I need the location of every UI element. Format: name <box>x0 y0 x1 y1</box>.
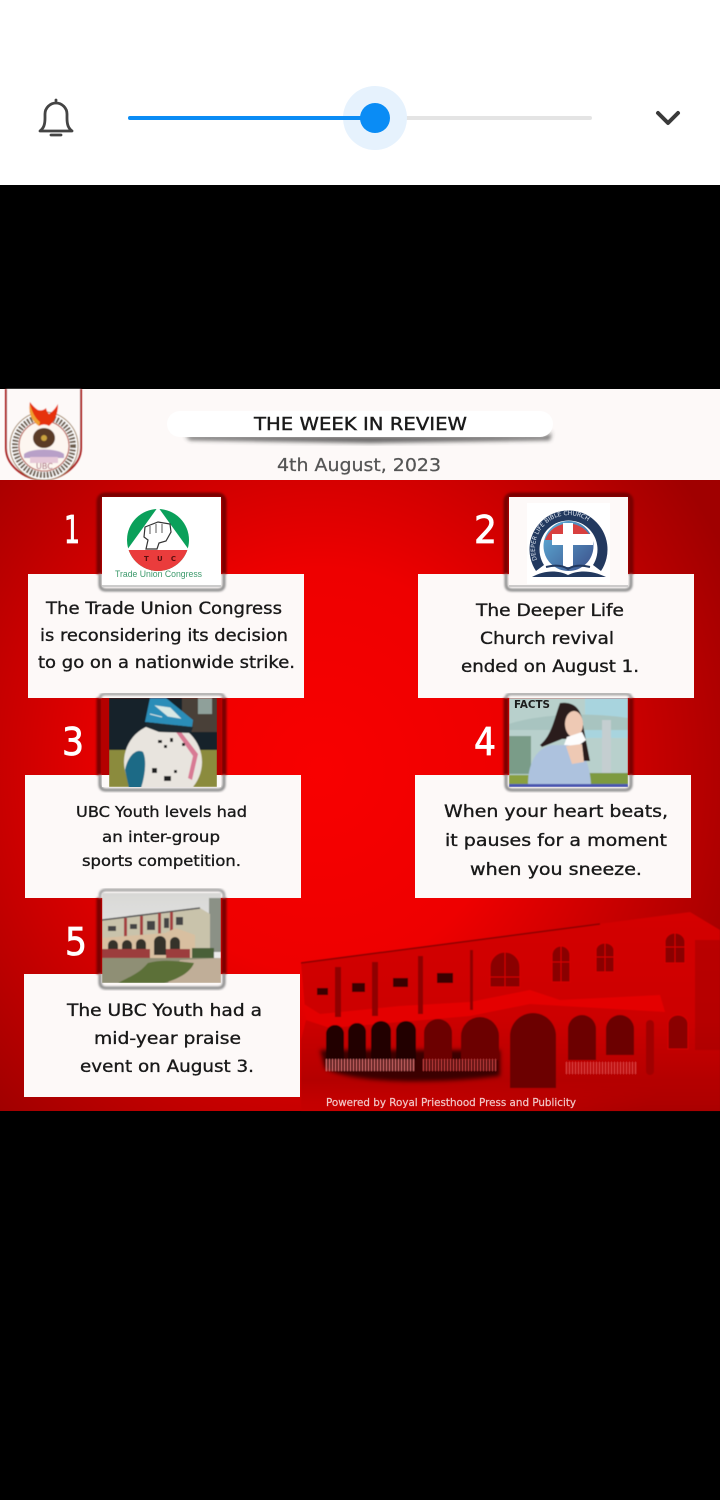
thumbnail 4: FACTS <box>514 699 550 711</box>
card 4 <box>415 775 691 898</box>
notification bar <box>0 0 720 185</box>
text 5: mid-year praise <box>94 1029 241 1049</box>
text 4 <box>444 802 668 880</box>
volume slider <box>128 86 592 150</box>
thumbnail 1: T U C <box>144 555 176 563</box>
card 1 <box>28 574 304 698</box>
balustrade <box>326 1065 638 1068</box>
number 5: 5 <box>65 920 87 964</box>
item 1 <box>28 495 304 698</box>
upper columns <box>335 950 473 1017</box>
icon: chevron <box>658 113 678 123</box>
title pill <box>167 411 553 443</box>
thumbnail 1: Trade Union Congress <box>115 569 202 579</box>
thumbnail 5 <box>99 890 224 988</box>
logo shield <box>6 389 81 480</box>
text 3 <box>76 803 247 870</box>
text 3: sports competition. <box>82 852 241 870</box>
text 3: an inter-group <box>102 828 220 846</box>
icon: bell <box>40 100 72 135</box>
text 1: The Trade Union Congress <box>45 599 282 619</box>
title: THE WEEK IN REVIEW <box>253 414 467 435</box>
text 2: Church revival <box>480 629 614 649</box>
red panel <box>0 480 720 1111</box>
item 4 <box>415 694 691 898</box>
text 5: event on August 3. <box>80 1057 254 1077</box>
text 3: UBC Youth levels had <box>76 803 247 821</box>
text 2: ended on August 1. <box>461 657 639 677</box>
text 2: The Deeper Life <box>475 601 624 621</box>
logo shield: UBC <box>36 462 53 471</box>
text 1: to go on a nationwide strike. <box>38 653 295 673</box>
right wing <box>646 940 720 1075</box>
item 2 <box>418 491 694 698</box>
number 2: 2 <box>474 508 497 552</box>
number 4: 4 <box>474 720 496 764</box>
number 3: 3 <box>62 720 84 764</box>
date: 4th August, 2023 <box>277 455 441 476</box>
text 5 <box>66 1001 262 1077</box>
lower arches <box>320 1050 500 1081</box>
thumbnail 1 <box>99 495 224 590</box>
text 4: when you sneeze. <box>470 860 642 880</box>
item 3 <box>25 694 301 898</box>
thumbnail 2: DEEPER LIFE BIBLE CHURCH <box>530 510 590 561</box>
number 1: 1 <box>64 508 80 552</box>
thumbnail 3 <box>99 694 224 801</box>
text 4: it pauses for a moment <box>445 831 667 851</box>
thumbnail 4 <box>506 694 631 790</box>
item 5 <box>24 890 300 1097</box>
text 2 <box>461 601 639 677</box>
card 3 <box>25 775 301 898</box>
text 5: The UBC Youth had a <box>66 1001 262 1021</box>
card 5 <box>24 974 300 1097</box>
upper windows <box>317 973 453 995</box>
thumbnail 2 <box>502 491 635 593</box>
card 2 <box>418 574 694 698</box>
text 4: When your heart beats, <box>444 802 668 822</box>
header band <box>0 389 720 481</box>
arched windows <box>490 933 688 1049</box>
text 1 <box>38 599 295 673</box>
building illustration <box>301 912 720 1111</box>
footer credit: Powered by Royal Priesthood Press and Publicity <box>326 1097 576 1109</box>
text 1: is reconsidering its decision <box>40 626 288 646</box>
